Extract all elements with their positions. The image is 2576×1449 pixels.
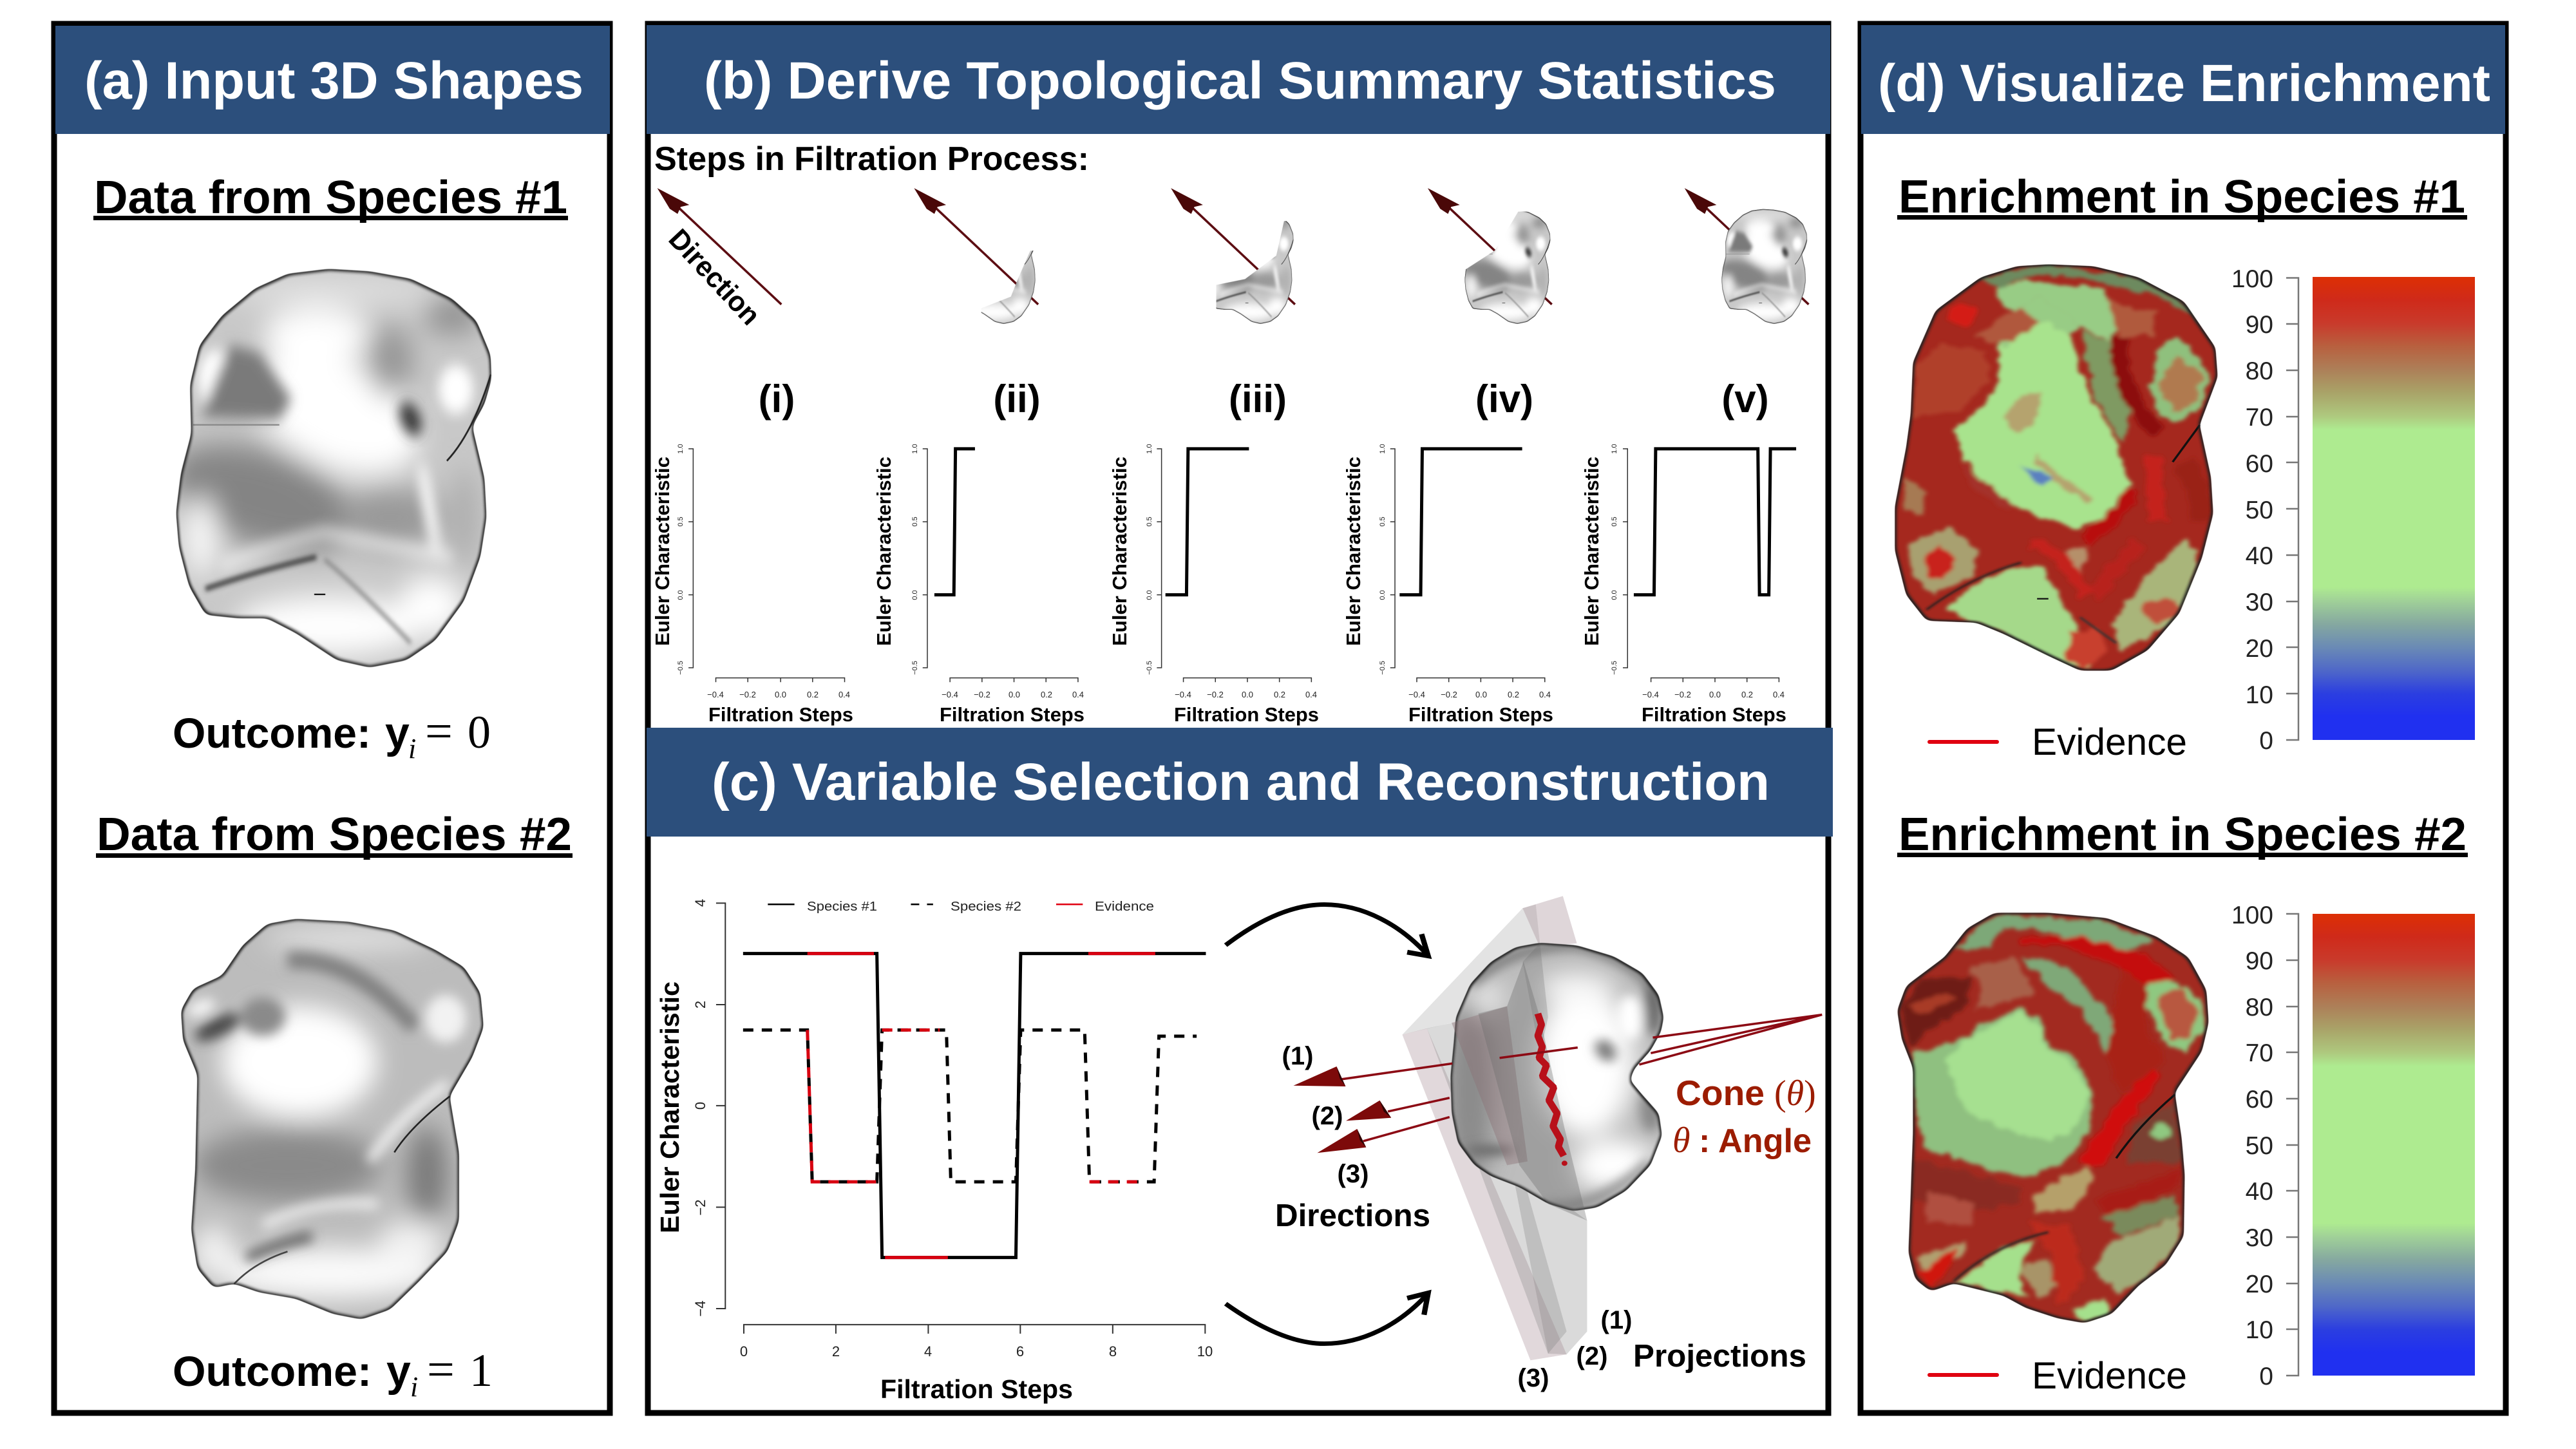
panel: (b) derive topological summary statistics xyxy=(647,25,1830,726)
color scale species 2: 0 xyxy=(2259,1363,2273,1390)
direction number labels: (1) xyxy=(1282,1042,1313,1070)
mini chart ii: −0.2 xyxy=(974,690,990,699)
heading: enrichment species 1: Enrichment in Species #1 xyxy=(1899,171,2465,223)
outcome label species 1: = xyxy=(425,705,453,759)
direction arrow head 2 xyxy=(1346,1101,1391,1121)
header bar d: (d) Visualize Enrichment xyxy=(1878,54,2490,113)
label: theta angle xyxy=(1672,1121,1812,1160)
mini chart v: 0.4 xyxy=(1773,690,1785,699)
direction number labels: (3) xyxy=(1338,1160,1368,1188)
mini chart iii: −0.5 xyxy=(1146,661,1153,675)
color scale species 2 xyxy=(2231,902,2475,1390)
evidence legend species 1: Evidence xyxy=(2032,721,2187,763)
panel: (a) input 3D shapes xyxy=(54,24,610,1413)
mini chart iii: 0.0 xyxy=(1242,690,1253,699)
color scale species 1: 0 xyxy=(2259,727,2273,755)
outcome label species 1 xyxy=(173,705,491,764)
color scale species 1: 60 xyxy=(2246,450,2273,478)
y axis labels: −4 xyxy=(692,1300,708,1317)
chart legend: Evidence xyxy=(1095,900,1154,914)
label: cone theta: (θ) xyxy=(1774,1074,1816,1113)
header bar c xyxy=(647,728,1833,837)
3D tooth shape species 2 xyxy=(181,918,484,1320)
color scale species 1: 50 xyxy=(2246,497,2273,524)
evidence legend species 2 xyxy=(1927,1355,2187,1397)
outcome label species 2: i xyxy=(410,1371,418,1403)
mini chart v xyxy=(1580,444,1796,726)
mini chart iv xyxy=(1342,444,1553,726)
x axis labels: 0 xyxy=(740,1343,748,1359)
mini chart i: 1.0 xyxy=(677,444,685,454)
color scale species 1: 90 xyxy=(2246,311,2273,339)
label: directions: Directions xyxy=(1275,1198,1430,1233)
step i: direction arrow: Direction xyxy=(663,223,766,331)
mini chart ii: 0.0 xyxy=(1009,690,1020,699)
color scale species 2: 90 xyxy=(2246,947,2273,975)
mini chart v: −0.2 xyxy=(1674,690,1691,699)
mini chart iii: −0.2 xyxy=(1207,690,1224,699)
outcome label species 1: 0 xyxy=(468,706,491,758)
species 2 dashed line xyxy=(743,1030,1197,1182)
direction arrow head 3 xyxy=(1317,1129,1366,1153)
color scale species 2: 60 xyxy=(2246,1086,2273,1113)
step v: arrow and full tooth xyxy=(1685,188,1808,324)
step labels i to v: (ii) xyxy=(993,377,1041,421)
color scale species 1: 20 xyxy=(2246,635,2273,663)
outcome label species 2: Outcome: xyxy=(173,1347,372,1395)
step labels i to v: (iv) xyxy=(1475,377,1533,421)
panel frame a xyxy=(54,24,610,1413)
mini chart iii: −0.4 xyxy=(1175,690,1191,699)
mini chart iv: −0.5 xyxy=(1379,661,1387,675)
panel frame d xyxy=(1861,24,2506,1413)
evidence streak xyxy=(1538,1014,1564,1156)
mini chart iv: 1.0 xyxy=(1379,444,1387,454)
heading: data from species 2: Data from Species #2 xyxy=(97,809,572,860)
label: theta angle: θ xyxy=(1672,1121,1690,1160)
mini chart i: 0.2 xyxy=(807,690,819,699)
outcome label species 1: y xyxy=(385,708,410,757)
mini chart v: 0.2 xyxy=(1741,690,1753,699)
color scale species 1: 30 xyxy=(2246,589,2273,616)
subheading: steps in filtration process: Steps in Filtration Process: xyxy=(654,140,1089,178)
color scale species 2: 10 xyxy=(2246,1316,2273,1344)
panel: (d) visualize enrichment xyxy=(1861,24,2506,1413)
mini chart i: −0.2 xyxy=(739,690,756,699)
mini chart iii: 0.5 xyxy=(1146,516,1153,527)
evidence legend species 1 xyxy=(1927,721,2187,763)
filtration step shapes with direction arrows xyxy=(658,188,1808,331)
mini chart i xyxy=(651,444,853,726)
translucent planes behind xyxy=(1402,896,1587,1360)
mini chart iii xyxy=(1108,444,1319,726)
mini chart i: 0.4 xyxy=(838,690,850,699)
mini chart v: 0.0 xyxy=(1709,690,1721,699)
y axis labels: 0 xyxy=(692,1102,708,1110)
cone direction lines xyxy=(1341,1015,1822,1141)
color scale species 2: 40 xyxy=(2246,1178,2273,1206)
projection number labels xyxy=(1518,1306,1632,1392)
header bar c: (c) Variable Selection and Reconstruction xyxy=(712,753,1770,811)
mini chart i: −0.5 xyxy=(677,661,685,675)
color scale species 2: 80 xyxy=(2246,994,2273,1021)
mini chart iii: 1.0 xyxy=(1146,444,1153,454)
y axis title: Euler Characteristic xyxy=(655,981,685,1233)
color scale species 1: 80 xyxy=(2246,357,2273,385)
x axis title: Filtration Steps xyxy=(880,1374,1073,1404)
header bar a xyxy=(55,26,610,134)
heading: enrichment species 2: Enrichment in Species #2 xyxy=(1899,809,2467,860)
y axis labels: −2 xyxy=(692,1199,708,1216)
species 1 solid line with evidence xyxy=(743,954,1206,1258)
x axis labels: 8 xyxy=(1109,1343,1117,1359)
3D tooth shape species 1 xyxy=(162,269,491,668)
mini chart ii: 0.2 xyxy=(1041,690,1052,699)
mini chart i: 0.0 xyxy=(677,590,685,600)
reconstruction: tooth with projection planes and cone xyxy=(1293,896,1822,1360)
y axis labels: 2 xyxy=(692,1001,708,1009)
mini chart v: −0.4 xyxy=(1642,690,1659,699)
label: theta angle: Angle xyxy=(1718,1122,1812,1160)
curved arrow top xyxy=(1226,905,1428,956)
mini chart ii: Euler Characteristic xyxy=(873,457,895,646)
heading: data from species 1: Data from Species #1 xyxy=(94,172,567,223)
mini chart iv: 0.5 xyxy=(1379,516,1387,527)
direction number labels: (2) xyxy=(1312,1102,1343,1130)
mini chart i: Euler Characteristic xyxy=(651,457,674,646)
translucent planes over tooth xyxy=(1452,943,1587,1220)
outcome label species 1: i xyxy=(408,733,416,764)
enrichment heatmap tooth species 2 xyxy=(1897,913,2209,1323)
x axis labels: 2 xyxy=(832,1343,840,1359)
step labels i to v xyxy=(759,377,1769,421)
outcome label species 2 xyxy=(173,1343,493,1403)
mini chart v: 0.5 xyxy=(1611,516,1618,527)
x axis labels: 10 xyxy=(1197,1343,1213,1359)
projection number labels: (3) xyxy=(1518,1364,1549,1392)
chart axes xyxy=(716,903,1205,1334)
label: projections: Projections xyxy=(1633,1339,1806,1374)
mini chart i: 0.5 xyxy=(677,516,685,527)
mini chart v: Euler Characteristic xyxy=(1580,457,1603,646)
chart legend: Species #1 xyxy=(807,900,877,914)
step iv: arrow and partial tooth xyxy=(1428,188,1552,324)
mini chart iii: 0.4 xyxy=(1305,690,1317,699)
color scale species 2: 50 xyxy=(2246,1132,2273,1160)
panel: (c) variable selection and reconstruction xyxy=(647,728,1833,1404)
x axis labels: 6 xyxy=(1016,1343,1024,1359)
y axis labels: 4 xyxy=(692,899,708,907)
mini chart i: −0.4 xyxy=(707,690,724,699)
evidence end dot xyxy=(1562,1160,1567,1166)
header bar d xyxy=(1861,25,2505,134)
mini chart ii: 0.0 xyxy=(911,590,919,600)
step labels i to v: (i) xyxy=(759,377,795,421)
mini chart iii: 0.2 xyxy=(1274,690,1285,699)
projection number labels: (2) xyxy=(1577,1342,1607,1370)
mini chart iv: Filtration Steps xyxy=(1408,703,1553,726)
mini chart v: 1.0 xyxy=(1611,444,1618,454)
mini chart iv: −0.2 xyxy=(1441,690,1457,699)
step ii: arrow and partial tooth xyxy=(914,188,1038,324)
mini chart i: 0.0 xyxy=(775,690,786,699)
color scale species 1: 10 xyxy=(2246,681,2273,709)
color scale species 2: 70 xyxy=(2246,1039,2273,1067)
mini chart iv: −0.4 xyxy=(1408,690,1425,699)
header bar a: (a) Input 3D Shapes xyxy=(84,52,583,110)
line chart: Euler characteristic by filtration step xyxy=(655,899,1213,1404)
y axis labels xyxy=(692,899,708,1317)
mini chart ii: −0.5 xyxy=(911,661,919,675)
mini chart ii: Filtration Steps xyxy=(940,703,1084,726)
x axis labels: 4 xyxy=(924,1343,932,1359)
enrichment heatmap tooth species 1 xyxy=(1895,264,2220,671)
panel: (b) and (c) frame xyxy=(648,24,1828,1413)
mini chart ii: −0.4 xyxy=(942,690,958,699)
header bar b xyxy=(647,25,1830,134)
mini chart iv: 0.2 xyxy=(1508,690,1519,699)
color scale species 1: 70 xyxy=(2246,404,2273,431)
mini chart ii: 0.5 xyxy=(911,516,919,527)
mini chart v: Filtration Steps xyxy=(1642,703,1786,726)
mini chart i: Filtration Steps xyxy=(708,703,853,726)
outcome label species 2: y xyxy=(386,1347,411,1396)
direction number labels xyxy=(1282,1042,1368,1188)
chart legend: Species #2 xyxy=(951,900,1021,914)
curved arrow bottom xyxy=(1226,1293,1428,1343)
mini chart ii: 1.0 xyxy=(911,444,919,454)
outcome label species 2: = xyxy=(427,1343,455,1397)
outcome label species 1: Outcome: xyxy=(173,709,371,757)
mini chart v: 0.0 xyxy=(1611,590,1618,600)
label: cone theta xyxy=(1676,1073,1816,1113)
mini chart iv: 0.4 xyxy=(1539,690,1551,699)
mini chart ii: 0.4 xyxy=(1072,690,1084,699)
step iii: arrow and partial tooth xyxy=(1171,188,1295,324)
mini chart iv: Euler Characteristic xyxy=(1342,457,1365,646)
mini chart iii: 0.0 xyxy=(1146,590,1153,600)
step labels i to v: (v) xyxy=(1721,377,1769,421)
gray tooth surface xyxy=(1445,943,1664,1211)
label: theta angle: : xyxy=(1699,1122,1710,1160)
mini chart ii xyxy=(873,444,1084,726)
header bar b: (b) Derive Topological Summary Statistics xyxy=(704,52,1776,110)
outcome label species 2: 1 xyxy=(469,1345,493,1396)
x axis labels xyxy=(740,1343,1213,1359)
direction arrow head 1 xyxy=(1293,1066,1345,1086)
color scale species 1: 40 xyxy=(2246,542,2273,570)
color scale species 1 xyxy=(2231,265,2475,755)
color scale species 1: 100 xyxy=(2231,265,2273,293)
step labels i to v: (iii) xyxy=(1229,377,1287,421)
label: cone theta: Cone xyxy=(1676,1073,1765,1113)
mini chart iv: 0.0 xyxy=(1475,690,1487,699)
mini chart v: −0.5 xyxy=(1611,661,1618,675)
step i: direction arrow xyxy=(658,188,781,331)
projection number labels: (1) xyxy=(1601,1306,1632,1334)
mini chart iii: Filtration Steps xyxy=(1174,703,1319,726)
color scale species 2: 100 xyxy=(2231,902,2273,929)
evidence legend species 2: Evidence xyxy=(2032,1355,2187,1397)
color scale species 2: 20 xyxy=(2246,1271,2273,1298)
color scale species 2: 30 xyxy=(2246,1224,2273,1252)
chart legend xyxy=(768,900,1154,914)
mini chart iv: 0.0 xyxy=(1379,590,1387,600)
mini chart iii: Euler Characteristic xyxy=(1108,457,1131,646)
